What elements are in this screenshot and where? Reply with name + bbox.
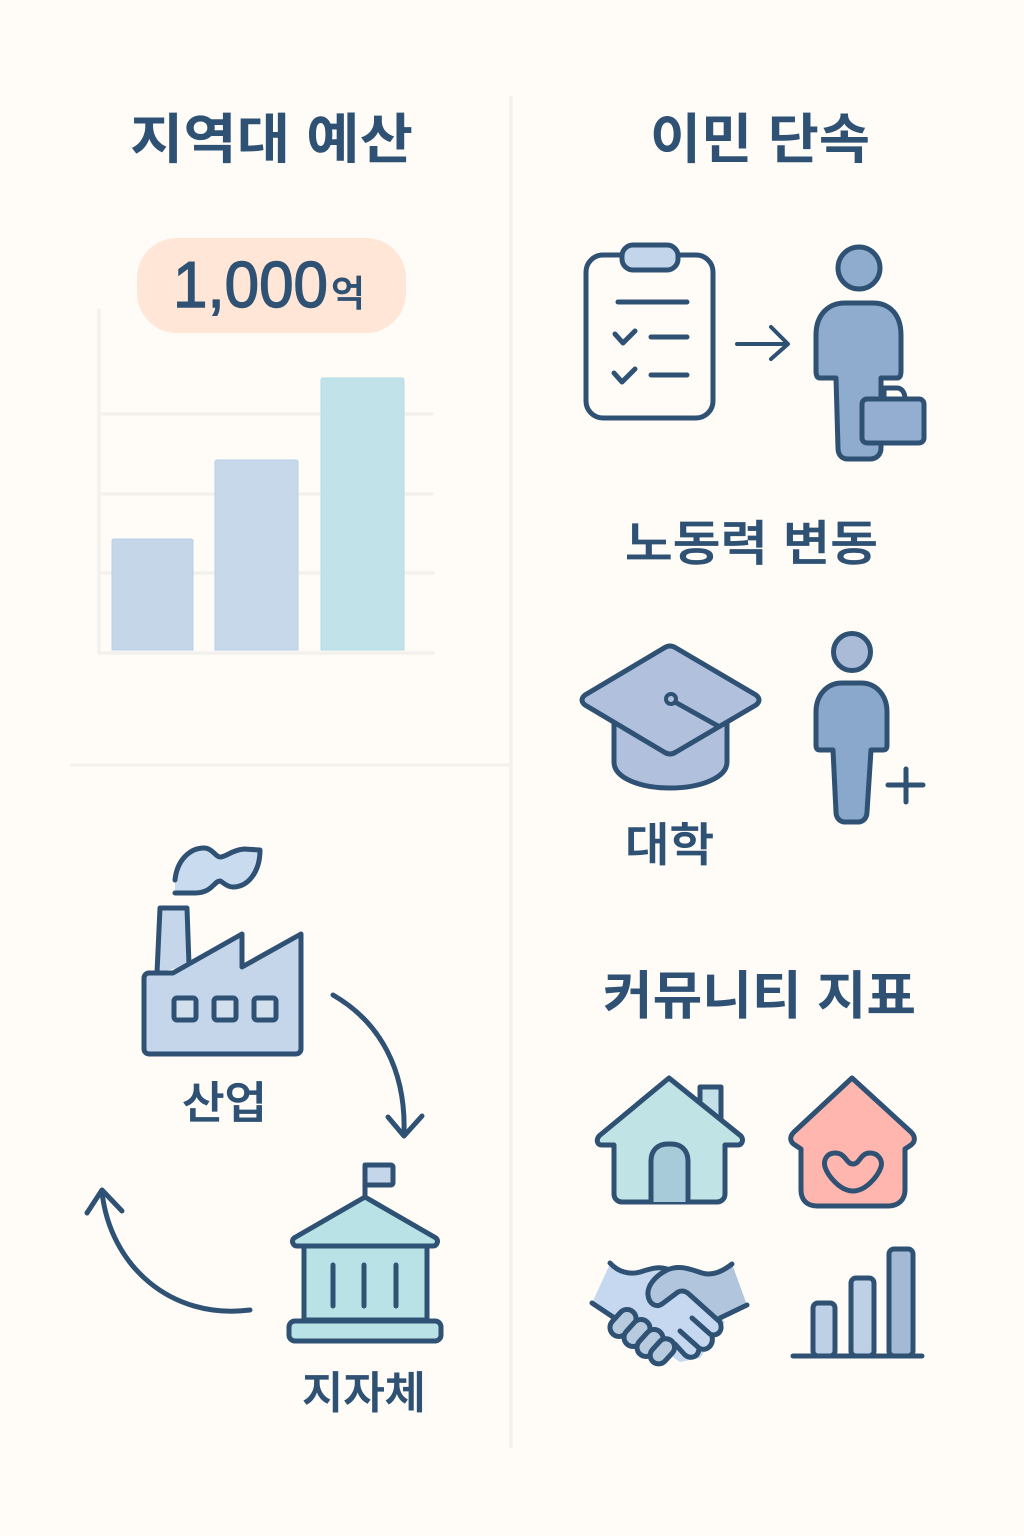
bar chart: budget xyxy=(99,310,433,653)
icon: worker with briefcase xyxy=(816,247,924,459)
icon: graduation cap xyxy=(582,646,759,788)
icon: government building xyxy=(289,1165,441,1341)
arrow: local government to start xyxy=(87,1190,250,1311)
label: university: 대학 xyxy=(625,809,714,875)
callout: 1,000 billion won: 1,000 xyxy=(173,248,328,321)
label: local government: 지자체 xyxy=(302,1357,426,1421)
callout: 1,000 billion won: 억 xyxy=(331,265,365,317)
heading: immigration crackdown: 이민 단속 xyxy=(650,95,870,174)
heading: community indicators: 커뮤니티 지표 xyxy=(603,954,916,1029)
heading: regional budget: 지역대 예산 xyxy=(130,95,413,174)
callout: 1,000 billion won xyxy=(137,238,406,333)
arrow: industry to local government xyxy=(333,995,422,1136)
icon: handshake xyxy=(592,1263,747,1367)
icon: factory xyxy=(144,848,301,1054)
icon: clipboard checklist xyxy=(586,245,713,418)
label: workforce change: 노동력 변동 xyxy=(625,504,878,574)
icon: person plus xyxy=(816,634,923,822)
icon: house with chimney xyxy=(597,1078,742,1202)
label: industry: 산업 xyxy=(182,1067,267,1131)
arrow: checklist to worker xyxy=(737,327,788,359)
icon: indicator bars xyxy=(793,1249,922,1356)
icon: house with heart xyxy=(791,1078,914,1206)
